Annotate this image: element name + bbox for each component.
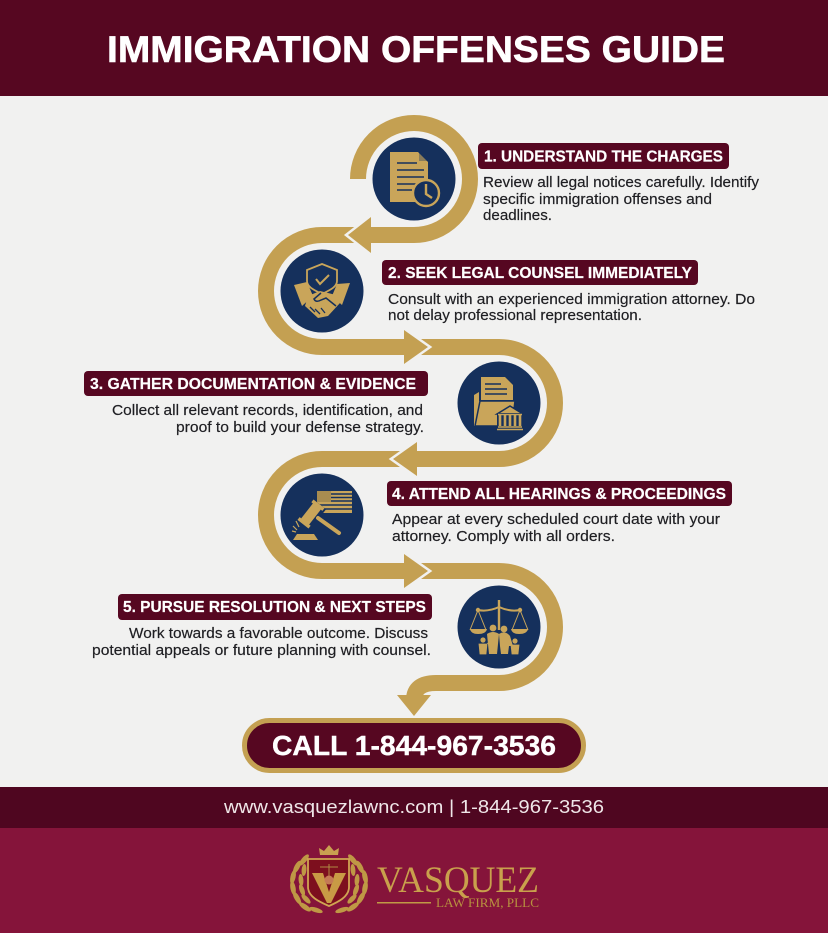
logo wordmark: VASQUEZ [377, 860, 539, 901]
step 4 text block [387, 481, 732, 545]
step 1 text block: deadlines. [483, 208, 552, 224]
step 4 text block: Appear at every scheduled court date with your [392, 512, 720, 528]
step 2 text block: Consult with an experienced immigration attorney. Do [388, 292, 755, 308]
ribbon segment 2 with right arrow [266, 235, 428, 364]
step 1 text block: specific immigration offenses and [483, 192, 712, 208]
logo: Vasquez Law Firm crest and wordmark [289, 845, 539, 914]
call to action button [244, 720, 584, 770]
step 1 text block [478, 143, 760, 224]
step 4 text block: attorney. Comply with all orders. [392, 529, 615, 545]
title: IMMIGRATION OFFENSES GUIDE [107, 29, 725, 70]
step 2 text block: 2. SEEK LEGAL COUNSEL IMMEDIATELY [388, 265, 693, 282]
step 3 text block: Collect all relevant records, identification, and [112, 403, 423, 419]
call to action button: CALL 1-844-967-3536 [272, 730, 556, 761]
step 4 text block: 4. ATTEND ALL HEARINGS & PROCEEDINGS [392, 486, 726, 503]
header band [0, 0, 828, 96]
ribbon segment 1 with left arrow [348, 123, 470, 253]
website and phone strip: www.vasquezlawnc.com | 1-844-967-3536 [223, 797, 604, 817]
step 5 text block: Work towards a favorable outcome. Discuss [129, 626, 428, 642]
step 2 text block [382, 260, 755, 324]
icon: scales of justice and family [458, 586, 540, 668]
ribbon segment 5 with arrow into call button [397, 571, 555, 716]
logo: Vasquez Law Firm crest and wordmark: LAW FIRM, PLLC [436, 895, 539, 910]
step 5 text block: potential appeals or future planning with counsel. [92, 643, 431, 659]
icon: document with clock [372, 138, 456, 220]
step 3 text block [84, 371, 428, 436]
step 3 text block: 3. GATHER DOCUMENTATION & EVIDENCE [90, 376, 416, 393]
footer band [0, 828, 828, 933]
website and phone strip [0, 787, 828, 828]
icon: shield and handshake [280, 250, 364, 332]
ribbon segment 4 with right arrow [266, 459, 428, 588]
step 3 text block: proof to build your defense strategy. [176, 420, 424, 436]
step 5 text block: 5. PURSUE RESOLUTION & NEXT STEPS [123, 599, 426, 616]
icon: folder and courthouse [458, 362, 540, 444]
icon: gavel and flag [280, 474, 364, 556]
step 5 text block [92, 594, 432, 659]
ribbon segment 3 with left arrow [393, 347, 555, 476]
logo crest [289, 845, 369, 914]
step 1 text block: 1. UNDERSTAND THE CHARGES [484, 148, 723, 166]
step 2 text block: not delay professional representation. [388, 308, 642, 324]
step 1 text block: Review all legal notices carefully. Identify [483, 175, 760, 191]
